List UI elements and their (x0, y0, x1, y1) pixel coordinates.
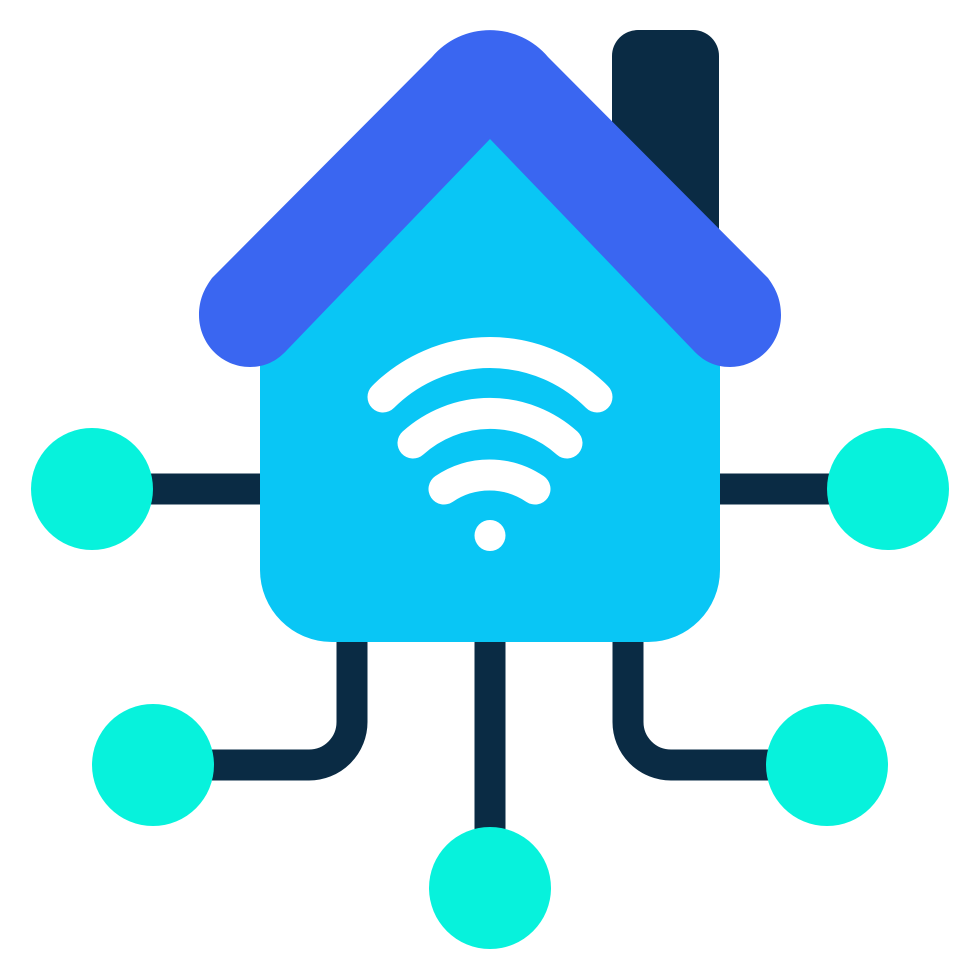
house body (260, 110, 720, 642)
connector lines (140, 489, 840, 840)
node: right (827, 428, 949, 550)
roof (199, 30, 781, 367)
chimney (612, 30, 719, 246)
node: lower right (766, 704, 888, 826)
wifi symbol (383, 353, 597, 551)
node: lower left (92, 704, 214, 826)
node: left (31, 428, 153, 550)
node: bottom (429, 827, 551, 949)
